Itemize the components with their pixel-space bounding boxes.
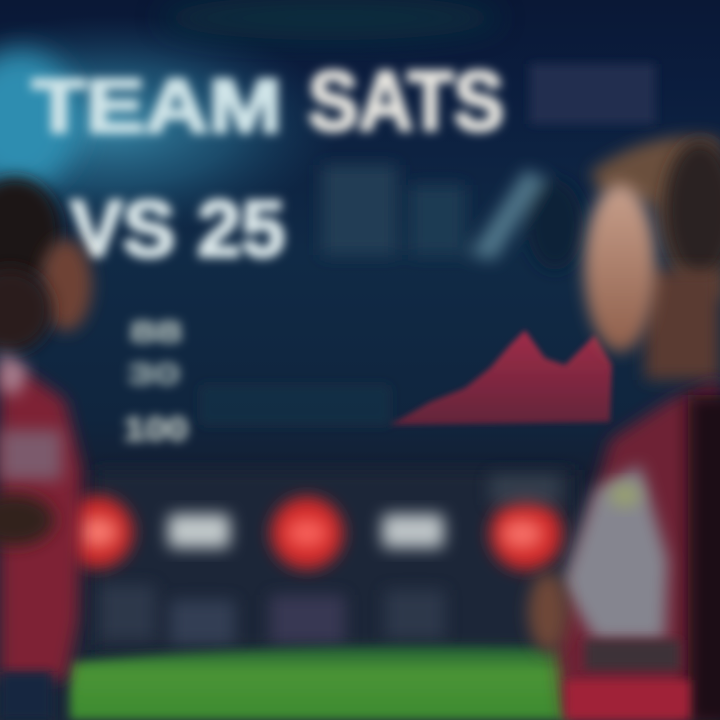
face [40,239,92,331]
jersey stripe [0,430,62,480]
stat labels: left column [124,316,188,447]
lower sleeve shadow [585,640,680,670]
chart: red area chart [200,330,612,425]
stat labels: left column: 100 [124,411,188,447]
badge [609,483,641,507]
hair [590,136,720,300]
value: right [382,514,444,548]
face [584,184,656,352]
right player [528,136,720,720]
stats panel: upper chart shapes [322,165,583,270]
value: left [168,514,230,548]
title: team stats: SATS [308,54,504,148]
dark panel [688,395,720,720]
title block: dim word at right [530,64,655,124]
hand [528,572,568,652]
hair [0,177,61,287]
stat labels: left column: 30 [128,358,180,391]
left player [0,177,92,720]
arm [0,494,54,546]
subtitle: versus score: VS 25 [70,184,285,273]
title: team stats: TEAM [32,64,282,149]
stat labels: left column: 88 [130,316,182,349]
title: team stats [32,54,504,149]
lower row: dim stat columns [100,475,560,645]
stat row: red badges and values [61,496,562,570]
badge: left red circle [61,496,133,568]
pitch: green grass [70,646,570,720]
neck and jaw [645,270,720,380]
lower jersey [565,680,690,720]
badge: right red circle [490,498,562,570]
jersey [0,365,82,680]
jersey [555,380,720,720]
badge: centre red circle [271,497,343,569]
sleeve [562,465,668,640]
shorts [0,672,52,720]
